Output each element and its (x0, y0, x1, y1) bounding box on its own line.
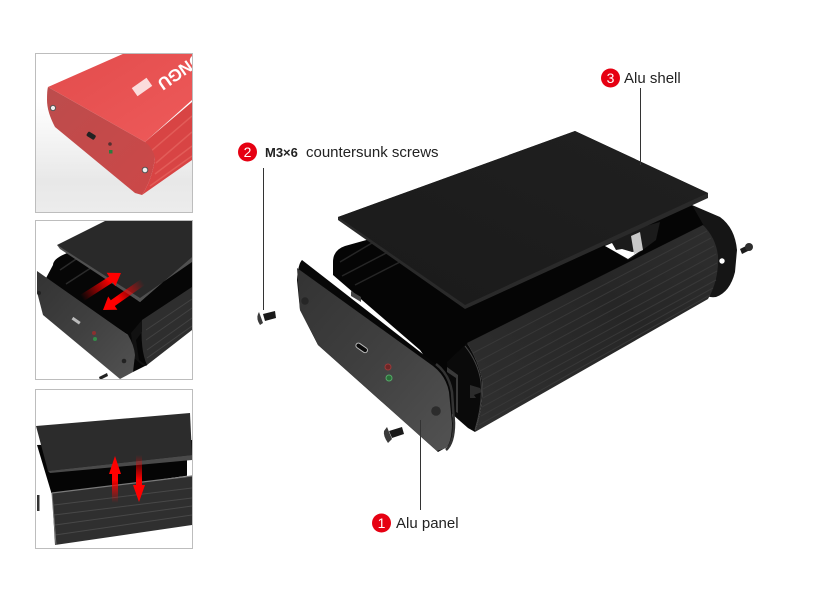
arrow: slide in (80, 273, 121, 301)
label: Alu shell: 3 (607, 70, 615, 86)
arrow: lower down (133, 455, 145, 502)
ribbed side wall (467, 225, 718, 432)
leader line: Alu panel (420, 420, 422, 510)
panel: assembled red enclosure thumbnail (36, 49, 207, 213)
exploded enclosure illustration (297, 131, 737, 452)
USB port (355, 342, 368, 354)
leader line: Alu shell (640, 88, 642, 165)
label: M3×6 countersunk screws: 2 (244, 144, 252, 160)
label: M3×6 countersunk screws: countersunk screws (306, 144, 439, 161)
red LED (385, 364, 391, 370)
green LED (386, 375, 392, 381)
label: Alu panel (372, 514, 459, 532)
front panel (297, 260, 453, 452)
enclosure interior (333, 205, 704, 390)
arrow: lift up (109, 456, 121, 503)
label: Alu panel: 1 (378, 515, 386, 531)
leader line: screws (262, 168, 264, 310)
arrow: slide out (103, 279, 145, 310)
icon: screw near front panel (384, 427, 404, 443)
panel: assembled red enclosure thumbnail: ONGU (154, 49, 207, 94)
label: M3×6 countersunk screws: M3×6 (265, 145, 298, 160)
icon: screw on left (257, 311, 276, 325)
icon: screw near back cap (740, 243, 753, 254)
label: Alu shell: Alu shell (624, 70, 681, 87)
circuit board glimpse (604, 222, 660, 260)
panel: top plate lifting thumbnail (36, 390, 192, 548)
label: Alu shell (601, 68, 681, 88)
back end cap (680, 205, 737, 297)
label: M3×6 countersunk screws (238, 142, 439, 162)
front profile of shell (447, 343, 482, 432)
label: Alu panel: Alu panel (396, 515, 459, 532)
top cover plate (338, 131, 708, 309)
panel: top plate sliding thumbnail (36, 220, 192, 380)
